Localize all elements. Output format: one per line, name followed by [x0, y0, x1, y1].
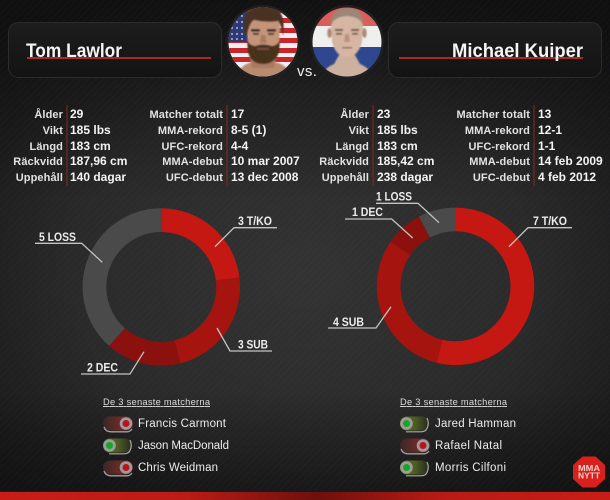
callout: 3 T/KO: 3 T/KO — [238, 216, 272, 228]
stats: Michael Kuiper personal: Uppehåll — [322, 172, 369, 184]
stats: Tom Lawlor career: UFC-rekord — [161, 141, 223, 153]
stats: Tom Lawlor career: 10 mar 2007 — [231, 154, 300, 168]
callout: 2 DEC: 2 DEC — [87, 363, 118, 375]
text: vs.: vs. — [297, 63, 317, 80]
panel: Tom Lawlor name plate — [8, 22, 222, 78]
stats: Tom Lawlor personal: Uppehåll — [16, 172, 63, 184]
stats: Tom Lawlor personal: Längd — [30, 141, 63, 153]
row: Francis Carmont, loss: Francis Carmont — [138, 418, 227, 430]
stats: Tom Lawlor personal: Vikt — [43, 125, 63, 137]
portrait: Michael Kuiper with Dutch flag — [310, 5, 384, 80]
stats: Michael Kuiper career: UFC-debut — [473, 172, 530, 184]
row: Jason MacDonald, win: Jason MacDonald — [138, 440, 229, 452]
stats: Michael Kuiper personal: 23 — [377, 107, 391, 121]
segment: 2 DEC — [109, 328, 180, 366]
stats: Michael Kuiper career: 1-1 — [538, 139, 556, 153]
callout: 1 DEC — [345, 207, 413, 238]
stats: Tom Lawlor career: UFC-debut — [166, 172, 223, 184]
footer bar — [0, 491, 610, 500]
stats: Tom Lawlor career: 8-5 (1) — [231, 123, 266, 137]
callout: 1 LOSS — [376, 192, 439, 223]
panel: Michael Kuiper last 3 fights — [400, 397, 516, 476]
stats: Tom Lawlor personal: 140 dagar — [70, 170, 126, 184]
panel: Michael Kuiper name plate — [388, 22, 602, 78]
stats: Tom Lawlor career: MMA-rekord — [158, 125, 223, 137]
stats: Tom Lawlor career: 4-4 — [231, 139, 249, 153]
stats: Tom Lawlor personal: 185 lbs — [70, 123, 111, 137]
heading: last fights, Lawlor: De 3 senaste matcherna — [103, 397, 211, 407]
stats: Michael Kuiper personal: Längd — [336, 141, 369, 153]
stats: Michael Kuiper personal: 183 cm — [377, 139, 418, 153]
stats: Tom Lawlor career: 13 dec 2008 — [231, 170, 299, 184]
row: Morris Cilfoni, win: Morris Cilfoni — [435, 462, 506, 474]
stats: Michael Kuiper career: 4 feb 2012 — [538, 170, 596, 184]
stats: Michael Kuiper career: UFC-rekord — [468, 141, 530, 153]
callout: 7 T/KO — [509, 216, 572, 247]
stats: Michael Kuiper personal: Ålder — [340, 108, 370, 121]
segment: 1 LOSS — [419, 208, 456, 238]
callout: 4 SUB: 4 SUB — [333, 317, 364, 329]
panel: Tom Lawlor last 3 fights — [103, 397, 229, 476]
stats: Michael Kuiper personal: Vikt — [349, 125, 369, 137]
stats: Tom Lawlor personal — [13, 105, 127, 186]
stats: Tom Lawlor career — [149, 105, 300, 186]
stats: Michael Kuiper personal: Räckvidd — [319, 156, 369, 168]
segment: 3 SUB — [174, 278, 240, 363]
callout: 7 T/KO: 7 T/KO — [533, 216, 567, 228]
stats: Michael Kuiper personal: 185 lbs — [377, 123, 418, 137]
stats: Tom Lawlor personal: Ålder — [34, 108, 64, 121]
stats: Michael Kuiper career: 12-1 — [538, 123, 562, 137]
heading: last fights, Kuiper: De 3 senaste matcherna — [400, 397, 508, 407]
stats: Michael Kuiper career: MMA-debut — [469, 156, 530, 168]
stats: Michael Kuiper career — [456, 105, 603, 186]
stats: Michael Kuiper career: 14 feb 2009 — [538, 154, 603, 168]
callout: 5 LOSS: 5 LOSS — [39, 232, 76, 244]
icon: MMA Nytt logo: NYTT — [578, 470, 601, 480]
row: Jared Hamman, win: Jared Hamman — [435, 418, 516, 430]
heading: Tom Lawlor: Tom Lawlor — [26, 41, 123, 62]
stats: Michael Kuiper career: 13 — [538, 107, 552, 121]
row: Chris Weidman, loss: Chris Weidman — [138, 462, 218, 474]
name underline: Kuiper — [399, 57, 583, 59]
stats: Tom Lawlor personal: 183 cm — [70, 139, 111, 153]
heading: Michael Kuiper: Michael Kuiper — [452, 41, 584, 62]
callout: 5 LOSS — [35, 232, 102, 262]
callout: 1 DEC: 1 DEC — [352, 207, 383, 219]
segment: 4 SUB — [377, 242, 442, 363]
stats: Tom Lawlor career: Matcher totalt — [149, 109, 223, 121]
stats: Tom Lawlor career: MMA-debut — [162, 156, 223, 168]
stats: Tom Lawlor career: 17 — [231, 107, 245, 121]
stats: Michael Kuiper personal: 185,42 cm — [377, 154, 434, 168]
row: Rafael Natal, loss: Rafael Natal — [435, 440, 502, 452]
callout: 3 SUB — [217, 328, 272, 352]
callout: 2 DEC — [81, 352, 144, 375]
icon: MMA Nytt logo: MMA — [578, 463, 600, 473]
stats: Michael Kuiper personal: 238 dagar — [377, 170, 433, 184]
segment: 7 T/KO — [437, 208, 534, 365]
stats: Michael Kuiper career: Matcher totalt — [456, 109, 530, 121]
icon: MMA Nytt logo — [573, 456, 605, 488]
stats: Tom Lawlor personal: Räckvidd — [13, 156, 63, 168]
segment: 1 DEC — [391, 217, 430, 255]
segment: 3 T/KO — [161, 208, 239, 280]
segment: 5 LOSS — [83, 208, 161, 346]
stats: Tom Lawlor personal: 187,96 cm — [70, 154, 127, 168]
chart: Tom Lawlor fight outcomes donut — [83, 208, 240, 366]
stats: Tom Lawlor personal: 29 — [70, 107, 84, 121]
name underline: Lawlor — [27, 57, 211, 59]
callout: 3 T/KO — [215, 216, 277, 247]
callout: 1 LOSS: 1 LOSS — [376, 192, 412, 204]
portrait: Tom Lawlor with US flag — [226, 5, 300, 80]
stats: Michael Kuiper personal — [319, 105, 434, 186]
callout: 4 SUB — [328, 307, 391, 329]
stats: Michael Kuiper career: MMA-rekord — [465, 125, 530, 137]
chart: Michael Kuiper fight outcomes donut — [377, 208, 534, 365]
callout: 3 SUB: 3 SUB — [238, 340, 268, 352]
